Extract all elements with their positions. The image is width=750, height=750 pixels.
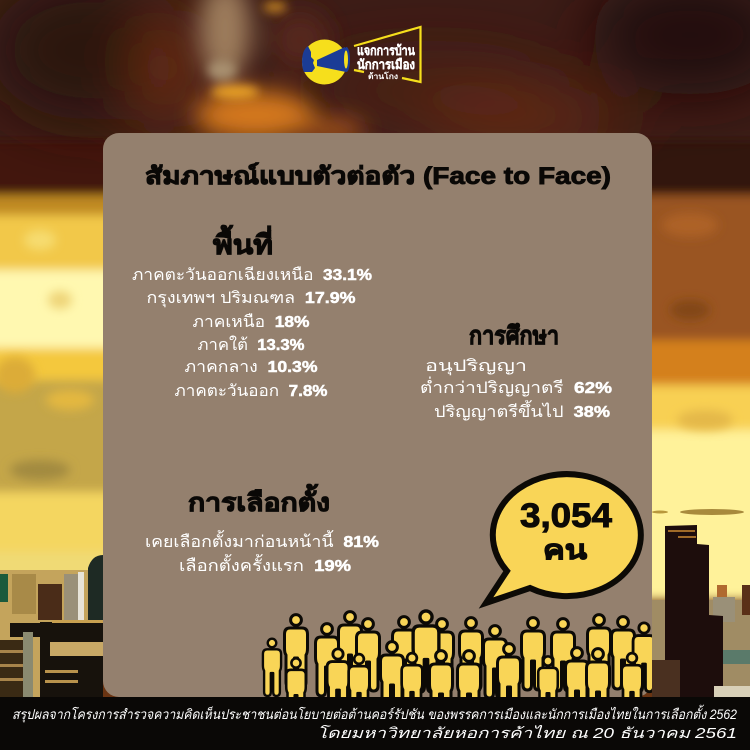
list: area shares: ภาคตะวันออก 7.8% (174, 383, 328, 400)
section: area (132, 224, 372, 400)
title: สัมภาษณ์แบบตัวต่อตัว (Face to Face) (145, 162, 611, 190)
list: education shares: ปริญญาตรีขึ้นไป 38% (434, 400, 610, 421)
list: election shares: เคยเลือกตั้งมาก่อนหน้านี้ 81% (145, 530, 379, 551)
logo: text frame: แจกการบ้าน (357, 43, 415, 58)
heading: area: พื้นที่ (213, 224, 273, 260)
list: area shares: ภาคกลาง 10.3% (184, 359, 318, 376)
sky bands, right side (625, 0, 750, 600)
side clouds (0, 213, 733, 480)
speech bubble: 3,054 people (486, 474, 641, 603)
logo: text frame (354, 27, 420, 82)
logo: text frame: นักการเมือง (357, 57, 415, 72)
footer band (0, 697, 750, 750)
list: education shares: ต่ำกว่าปริญญาตรี 62% (420, 376, 612, 397)
footer source note: โดยมหาวิทยาลัยหอการค้าไทย ณ 20 ธันวาคม 2561 (317, 724, 737, 742)
list: election shares: เลือกตั้งครั้งแรก 19% (179, 554, 351, 575)
logo: yellow circle with megaphone (302, 40, 350, 84)
crowd of people icons (262, 609, 652, 697)
section: education (420, 322, 612, 421)
top clouds (0, 0, 750, 142)
heading: election: การเลือกตั้ง (188, 483, 330, 517)
main panel (103, 133, 652, 697)
list: area shares (132, 266, 372, 400)
list: area shares: กรุงเทพฯ ปริมณฑล 17.9% (146, 290, 356, 308)
list: education shares (420, 358, 612, 421)
speech bubble: 3,054 people: คน (543, 535, 588, 565)
sky bands, left side (0, 0, 130, 582)
right skyline (652, 525, 750, 700)
heading: education: การศึกษา (469, 322, 559, 350)
logo (302, 27, 420, 84)
speech bubble: 3,054 people: 3,054 (520, 497, 612, 535)
list: area shares: ภาคใต้ 13.3% (198, 335, 304, 354)
footer source note (12, 704, 737, 742)
list: education shares: อนุปริญญา (425, 358, 527, 376)
list: election shares (145, 530, 379, 575)
list: area shares: ภาคตะวันออกเฉียงเหนือ 33.1% (132, 266, 372, 284)
logo: text frame: ต้านโกง (368, 71, 398, 81)
list: area shares: ภาคเหนือ 18% (192, 313, 310, 331)
section: election (145, 483, 379, 575)
left skyline (0, 555, 103, 700)
